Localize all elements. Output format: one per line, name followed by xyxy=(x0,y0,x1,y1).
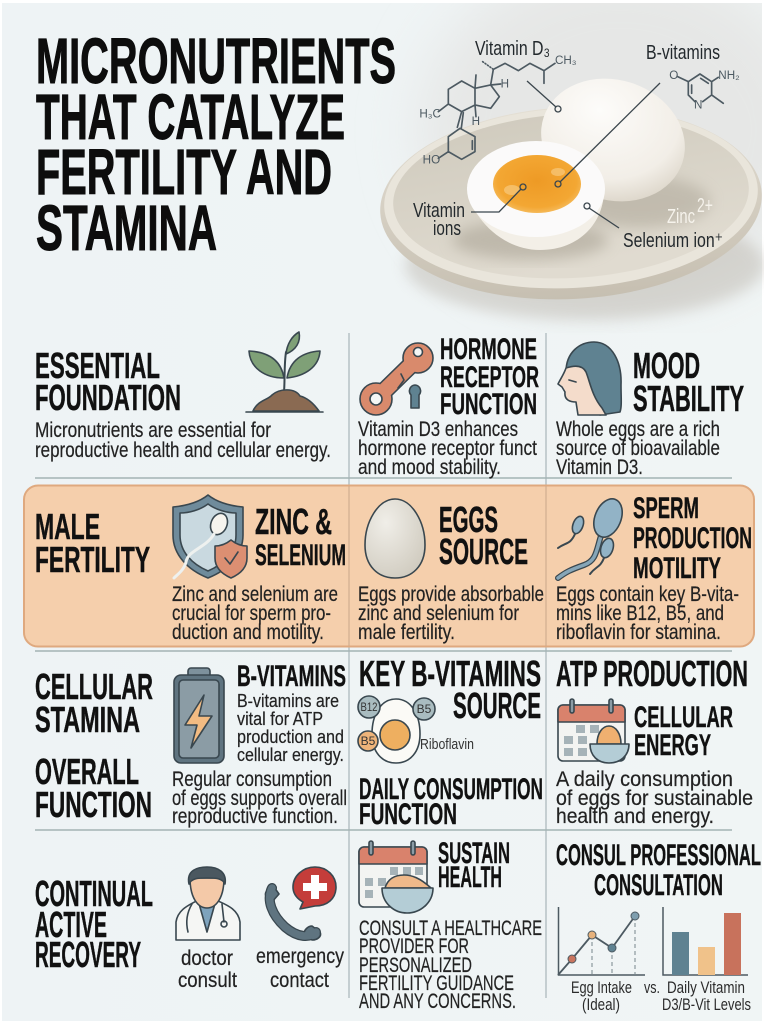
text: b-vitamins: production and xyxy=(237,727,344,747)
icon: egg with vitamin bubbles: B5 xyxy=(361,734,376,748)
heading: continual active recovery: CONTINUAL xyxy=(35,873,153,914)
text: essential foundation xyxy=(35,419,331,462)
heading: male fertility xyxy=(35,506,150,580)
panel: continual active recovery xyxy=(35,867,344,992)
heading: mood stability xyxy=(633,345,744,419)
panel: eggs source xyxy=(358,499,544,644)
heading: professional consultation xyxy=(556,839,761,902)
title: MICRONUTRIENTS xyxy=(36,25,396,97)
molecule: B-vitamin: N xyxy=(694,99,702,112)
icon: woman profile xyxy=(558,342,621,415)
heading: cellular stamina xyxy=(35,666,153,740)
molecule: Vitamin D3: H xyxy=(501,78,509,91)
text: essential foundation: reproductive health and cellular energy. xyxy=(35,439,331,462)
hero callouts: Vitamin D₃ xyxy=(475,38,550,60)
heading: sustain health: HEALTH xyxy=(438,861,502,894)
text: consult a healthcare provider: PERSONALIZED xyxy=(359,954,472,977)
text: mood stability: Vitamin D3. xyxy=(556,456,643,479)
heading: overall function: FUNCTION xyxy=(35,784,152,825)
icon: doctor xyxy=(176,867,240,940)
text: essential foundation: Micronutrients are essential for xyxy=(35,419,271,442)
panel: atp production xyxy=(556,653,753,828)
text: atp production: of eggs for sustainable xyxy=(556,787,753,810)
heading: eggs source: EGGS xyxy=(439,499,498,540)
text: overall function: of eggs supports overall xyxy=(172,787,347,810)
icon: calendar with egg bowl xyxy=(558,699,629,763)
text: eggs source: zinc and selenium for xyxy=(358,602,519,625)
molecule: Vitamin D3 xyxy=(419,54,577,166)
molecule: Vitamin D3: HO xyxy=(423,153,440,166)
hero callouts: ions xyxy=(433,218,461,240)
text: b-vitamins: B-vitamins are xyxy=(237,691,339,711)
icon: egg with vitamin bubbles: B12 xyxy=(360,700,378,714)
label: doctor consult: doctor xyxy=(181,947,233,970)
heading: daily consumption function xyxy=(359,773,543,831)
heading: zinc and selenium: ZINC & xyxy=(255,501,332,542)
title: STAMINA xyxy=(36,192,217,264)
chart captions: vs. xyxy=(644,978,660,997)
text: hormone receptor xyxy=(358,418,537,479)
heading: daily consumption function: DAILY CONSUMPTION xyxy=(359,773,543,806)
text: eggs source xyxy=(358,583,544,644)
text: overall function xyxy=(172,768,347,828)
hero callouts: Zinc xyxy=(667,206,695,228)
icon: egg with vitamin bubbles: B5 xyxy=(417,702,432,716)
panel: essential foundation xyxy=(35,332,331,462)
chart captions xyxy=(571,978,751,1014)
icon: sperm cells xyxy=(558,495,628,578)
heading: continual active recovery: ACTIVE xyxy=(35,904,107,945)
heading: zinc and selenium xyxy=(255,501,346,572)
heading: hormone receptor function: RECEPTOR xyxy=(440,361,539,394)
panel: hormone receptor function xyxy=(358,333,539,479)
heading: hormone receptor function: FUNCTION xyxy=(440,388,537,421)
text: sperm production: mins like B12, B5, and xyxy=(556,602,724,625)
heading: key b-vitamins source xyxy=(359,653,541,726)
panel: sperm production motility xyxy=(556,492,752,644)
text: consult a healthcare provider xyxy=(359,917,542,1013)
panel: mood stability xyxy=(556,342,744,479)
heading: mood stability: MOOD xyxy=(633,345,700,386)
icon: emergency phone xyxy=(265,867,336,940)
text: hormone receptor: Vitamin D3 enhances xyxy=(358,418,518,441)
heading: daily consumption function: FUNCTION xyxy=(359,798,457,831)
hero illustration: eggs on a plate xyxy=(375,60,764,320)
heading: key b-vitamins source: SOURCE xyxy=(453,685,541,726)
heading: sustain health: SUSTAIN xyxy=(438,837,510,870)
text: eggs source: male fertility. xyxy=(358,621,455,644)
text: consult a healthcare provider: FERTILITY GUIDANCE xyxy=(359,972,514,995)
icon: battery xyxy=(174,668,224,763)
text: mood stability: source of bioavailable xyxy=(556,437,720,460)
heading: continual active recovery xyxy=(35,873,153,975)
molecule: B-vitamin: NH₂ xyxy=(718,69,740,82)
heading: sustain health xyxy=(438,837,510,894)
molecule: Vitamin D3: CH₃ xyxy=(555,54,577,67)
text: mood stability xyxy=(556,418,720,479)
icon: egg with vitamin bubbles xyxy=(358,696,435,763)
heading: cellular energy: ENERGY xyxy=(634,729,711,762)
molecule: Vitamin D3: H xyxy=(472,115,480,128)
label: riboflavin: Riboflavin xyxy=(420,736,474,753)
heading: essential foundation: FOUNDATION xyxy=(35,377,181,418)
panel: male fertility band xyxy=(24,486,754,646)
label: doctor consult: consult xyxy=(178,969,237,992)
molecule: B-vitamin xyxy=(669,69,740,112)
band dividers xyxy=(349,486,546,646)
text: atp production: health and energy. xyxy=(556,805,714,828)
heading: eggs source xyxy=(439,499,528,572)
heading: essential foundation xyxy=(35,345,181,418)
chart captions: Daily Vitamin xyxy=(667,978,745,997)
title xyxy=(36,25,396,264)
molecule: Vitamin D3: H₃C xyxy=(419,108,441,121)
hero callouts xyxy=(413,38,723,252)
text: zinc and selenium xyxy=(172,583,338,644)
grid dividers xyxy=(349,333,546,998)
hero callouts: Selenium ion⁺ xyxy=(623,230,723,252)
text: overall function: reproductive function. xyxy=(172,805,338,828)
text: b-vitamins: vital for ATP xyxy=(237,709,323,729)
heading: male fertility: MALE xyxy=(35,506,100,547)
heading: male fertility: FERTILITY xyxy=(35,539,150,580)
icon: key and keyhole xyxy=(360,343,433,415)
label: emergency contact: emergency xyxy=(256,945,344,968)
label: emergency contact: contact xyxy=(270,969,329,992)
title: THAT CATALYZE xyxy=(36,81,345,153)
text: zinc and selenium: duction and motility. xyxy=(172,621,324,644)
text: hormone receptor: and mood stability. xyxy=(358,456,501,479)
chart captions: Egg Intake xyxy=(571,978,632,997)
text: consult a healthcare provider: CONSULT A HEALTHCARE xyxy=(359,917,542,940)
heading: overall function xyxy=(35,751,152,825)
text: overall function: Regular consumption xyxy=(172,768,332,791)
label: doctor consult xyxy=(178,947,237,992)
heading: sperm production motility xyxy=(633,492,752,585)
heading: key b-vitamins source: KEY B-VITAMINS xyxy=(359,653,541,694)
panel: cellular stamina and overall function xyxy=(35,660,347,828)
panel: professional consultation xyxy=(556,839,761,1014)
heading: overall function: OVERALL xyxy=(35,751,139,792)
heading: continual active recovery: RECOVERY xyxy=(35,934,141,975)
hero callouts: B-vitamins xyxy=(646,42,720,64)
panel: sustain health xyxy=(359,837,542,1013)
heading: b-vitamins: B-VITAMINS xyxy=(237,660,346,693)
text: b-vitamins: cellular energy. xyxy=(237,745,344,765)
text: zinc and selenium: crucial for sperm pro- xyxy=(172,602,331,625)
text: eggs source: Eggs provide absorbable xyxy=(358,583,544,606)
text: atp production xyxy=(556,768,753,828)
heading: sperm production motility: SPERM xyxy=(633,492,699,525)
icon: calendar with bowl xyxy=(359,841,433,913)
heading: hormone receptor function: HORMONE xyxy=(440,333,537,366)
text: consult a healthcare provider: AND ANY CONCERNS. xyxy=(359,990,516,1013)
text: zinc and selenium: Zinc and selenium are xyxy=(172,583,338,606)
text: consult a healthcare provider: PROVIDER FOR xyxy=(359,935,469,958)
text: b-vitamins xyxy=(237,691,344,765)
heading: cellular stamina: STAMINA xyxy=(35,699,140,740)
panel: key b-vitamins source xyxy=(358,653,543,831)
heading: cellular stamina: CELLULAR xyxy=(35,666,153,707)
text: mood stability: Whole eggs are a rich xyxy=(556,418,720,441)
panel: zinc and selenium xyxy=(172,495,346,644)
text: sperm production: riboflavin for stamina. xyxy=(556,621,721,644)
hero photo backdrop xyxy=(426,3,762,242)
text: hormone receptor: hormone receptor funct xyxy=(358,437,537,460)
heading: eggs source: SOURCE xyxy=(439,531,528,572)
heading: essential foundation: ESSENTIAL xyxy=(35,345,160,386)
molecule: B-vitamin: O xyxy=(669,69,678,82)
label: emergency contact xyxy=(256,945,344,992)
text: sperm production xyxy=(556,583,739,644)
heading: cellular energy xyxy=(634,701,733,762)
icon: seedling xyxy=(246,332,323,412)
title: FERTILITY AND xyxy=(36,136,332,208)
heading: zinc and selenium: SELENIUM xyxy=(255,539,346,572)
bar chart: vitamin levels xyxy=(663,907,748,975)
hero callouts: Vitamin xyxy=(413,200,465,222)
heading: hormone receptor function xyxy=(440,333,539,421)
icon: egg xyxy=(365,499,425,578)
text: atp production: A daily consumption xyxy=(556,768,733,791)
line chart: egg intake xyxy=(558,907,645,975)
chart captions: (Ideal) xyxy=(582,995,620,1014)
hero callouts: 2+ xyxy=(697,195,713,217)
icon: shield with sperm xyxy=(173,495,247,578)
